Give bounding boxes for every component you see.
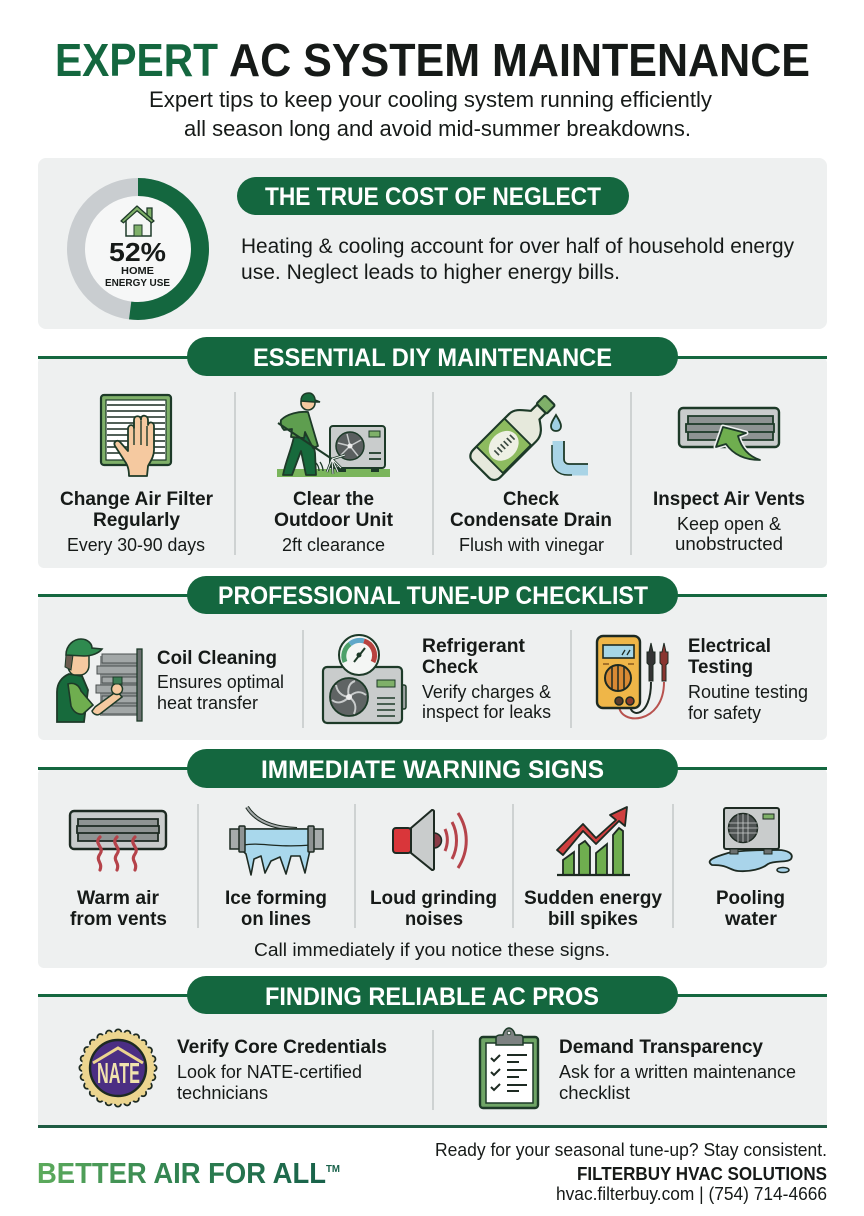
icon: vent with green arrow [679,408,779,460]
donut chart: 52% home energy use [76,187,200,311]
item: refrigerant check [323,635,551,723]
icon: AC unit with gauge [323,635,406,723]
label: Warm air [77,887,159,909]
panel: finding reliable AC pros [38,976,827,1128]
item: ice forming on lines [225,807,327,930]
label [225,887,327,930]
icon: rising bar chart with arrow [557,807,630,875]
label: Loud grinding [370,887,497,909]
label: Ice forming [225,887,327,909]
icon: NATE badge [82,1032,154,1104]
item: warm air from vents [70,811,167,930]
footer contact: hvac.filterbuy.com | (754) 714-4666 [556,1184,827,1204]
label: Verify Core Credentials [177,1036,387,1058]
icon: vinegar bottle and drain pipe [467,387,588,483]
footer contact: FILTERBUY HVAC SOLUTIONS [577,1164,827,1184]
label: noises [405,908,463,930]
label: Flush with vinegar [459,535,604,555]
donut chart: 52% home energy use: HOME [121,265,154,277]
footer contact: Ready for your seasonal tune-up? Stay consistent. [435,1140,827,1160]
subtitle: Expert tips to keep your cooling system running efficiently [149,87,712,112]
label [70,887,167,930]
heading pill: essential DIY maintenance [187,337,678,376]
heading pill: professional tune-up checklist [187,576,678,614]
heading pill: finding reliable AC pros: FINDING RELIABLE AC PROS [265,983,599,1011]
label: Ask for a written maintenance [559,1062,796,1082]
item: check condensate drain [450,387,612,555]
callout: call immediately: Call immediately if you notice these signs. [254,940,610,960]
heading pill: the true cost of neglect: THE TRUE COST OF NEGLECT [265,183,601,211]
label: Verify charges & [422,682,551,702]
item: verify core credentials [82,1032,387,1104]
panel: the true cost of neglect [38,158,827,329]
label: Check [503,488,559,510]
label [716,887,785,930]
brand tagline: TM [326,1164,340,1175]
icon: worker raking by outdoor unit [277,393,390,477]
item: demand transparency [480,1028,796,1108]
item: loud grinding noises [370,810,497,930]
label: heat transfer [157,693,258,713]
label: Pooling [716,887,785,909]
label: 2ft clearance [282,535,385,555]
text block: neglect description: Heating & cooling account for over half of household energy [241,235,794,258]
heading pill: immediate warning signs: IMMEDIATE WARNING SIGNS [261,756,604,784]
label [422,635,551,722]
icon: speaker with sound waves [393,810,466,870]
icon: clipboard checklist [480,1028,538,1108]
heading pill: immediate warning signs [187,749,678,788]
label: for safety [688,703,761,723]
label: bill spikes [548,908,638,930]
label: Outdoor Unit [274,509,394,531]
icon: house [121,206,154,236]
label: technicians [177,1083,268,1103]
item: electrical testing [597,635,808,723]
label [653,488,805,554]
icon: NATE badge: NATE [97,1058,140,1090]
item: coil cleaning [57,639,284,722]
label [274,488,394,555]
label [60,488,213,555]
label: Electrical [688,635,771,657]
label: inspect for leaks [422,702,551,722]
label: Testing [688,656,753,678]
label: Change Air Filter [60,488,213,510]
brand tagline: BETTER AIR FOR ALL [37,1158,326,1190]
item: clear the outdoor unit [274,393,394,555]
label: Regularly [93,509,180,531]
label: Demand Transparency [559,1036,763,1058]
label [688,635,808,723]
icon: frozen pipe [230,807,323,875]
subtitle [149,87,712,141]
label: Routine testing [688,682,808,702]
label: from vents [70,908,167,930]
heading pill: essential DIY maintenance: ESSENTIAL DIY MAINTENANCE [253,344,612,372]
label: water [724,908,777,930]
heading pill: professional tune-up checklist: PROFESSIONAL TUNE-UP CHECKLIST [218,582,648,610]
title: AC SYSTEM MAINTENANCE [229,34,810,86]
label: Check [422,656,478,678]
label [524,887,662,930]
heading pill: the true cost of neglect [237,177,629,215]
panel: essential DIY maintenance [38,337,827,568]
label: Sudden energy [524,887,662,909]
label [177,1036,387,1103]
label: checklist [559,1083,630,1103]
label [157,647,284,713]
label: Inspect Air Vents [653,488,805,510]
label: unobstructed [675,534,783,554]
donut chart: 52% home energy use: 52% [109,237,166,267]
label [370,887,497,930]
item: sudden energy bill spikes [524,807,662,930]
label [450,488,612,555]
footer contact [435,1140,827,1204]
icon: vent with heat waves [70,811,166,870]
label: Condensate Drain [450,509,612,531]
icon: outdoor unit over puddle [710,808,792,872]
label: Look for NATE-certified [177,1062,362,1082]
label: Ensures optimal [157,672,284,692]
donut chart: 52% home energy use: ENERGY USE [105,277,170,289]
panel: professional tune-up checklist [38,576,827,740]
label [559,1036,796,1103]
item: pooling water [710,808,792,930]
label: Coil Cleaning [157,647,277,669]
item: change air filter [60,395,213,555]
text block: neglect description [241,235,794,284]
heading pill: finding reliable AC pros [187,976,678,1014]
label: Keep open & [677,514,781,534]
label: on lines [241,908,311,930]
panel: immediate warning signs [38,749,827,968]
title: EXPERT [55,34,218,86]
subtitle: all season long and avoid mid-summer breakdowns. [184,116,691,141]
label: Every 30-90 days [67,535,205,555]
icon: multimeter [597,636,668,718]
label: Clear the [293,488,374,510]
icon: air filter with hand [101,395,171,476]
text block: neglect description: use. Neglect leads to higher energy bills. [241,261,620,284]
label: Refrigerant [422,635,525,657]
item: inspect air vents [653,408,805,554]
icon: technician cleaning coil [57,639,142,722]
